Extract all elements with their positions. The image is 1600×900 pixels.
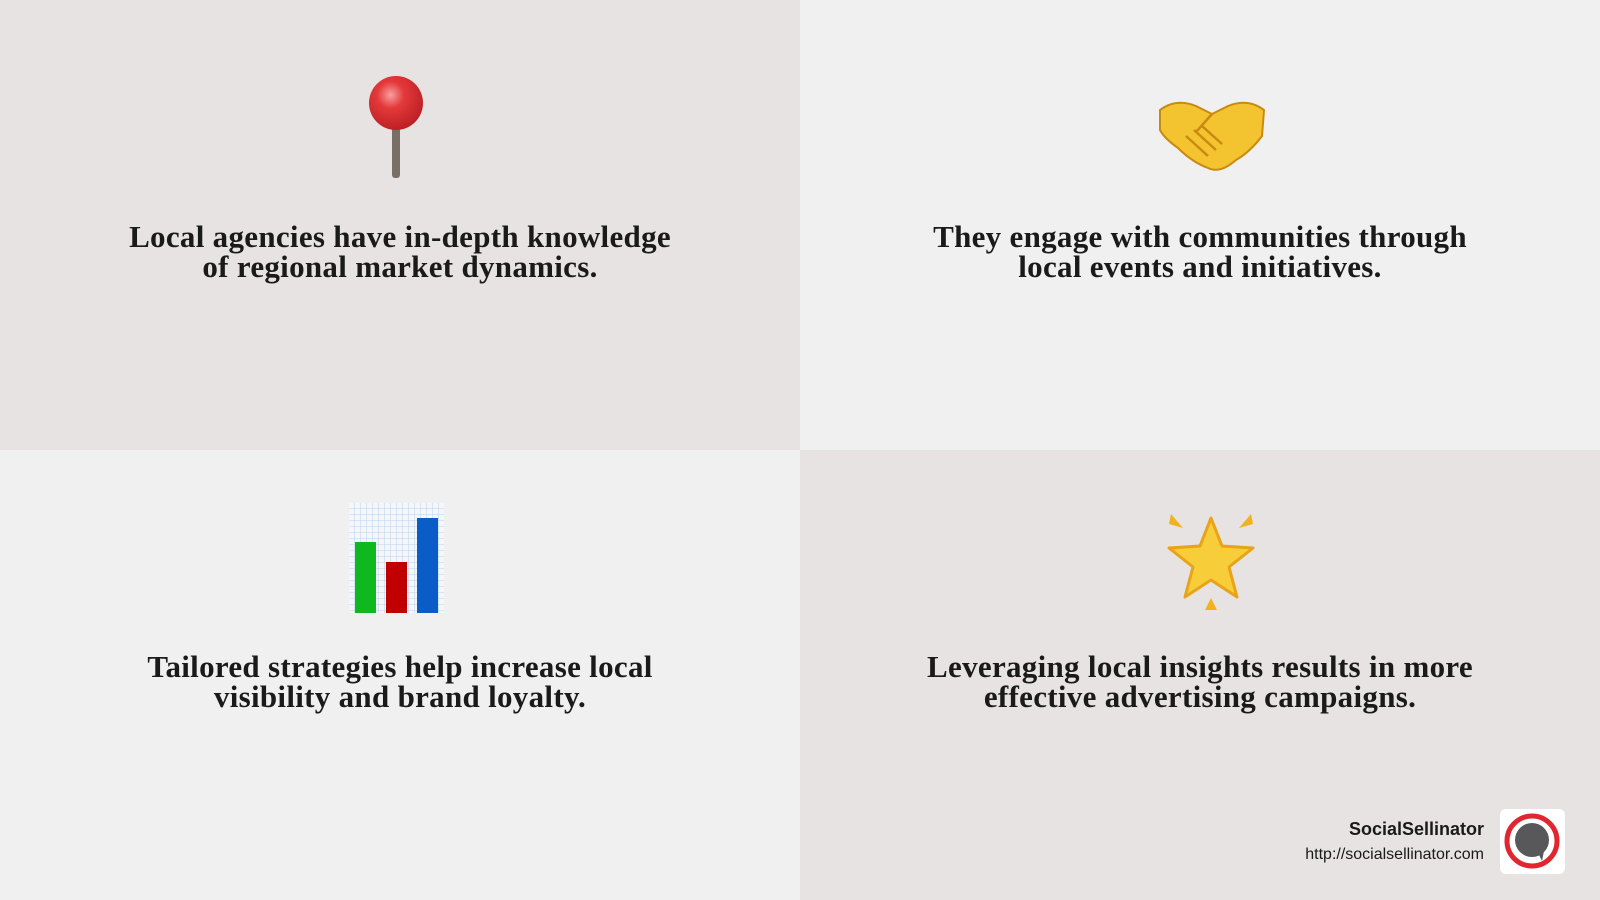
brand: SocialSellinator: http://socialsellinator.com xyxy=(1305,846,1484,863)
text: regional knowledge: Local agencies have in-depth knowledge xyxy=(129,219,671,254)
text: community: They engage with communities through xyxy=(933,219,1467,254)
text: tailored strategies: Tailored strategies help increase local xyxy=(147,649,653,684)
icon: pin xyxy=(369,76,423,178)
icon: star xyxy=(1167,514,1254,610)
brand: SocialSellinator xyxy=(1305,819,1484,863)
text: regional knowledge xyxy=(129,219,671,284)
panel: regional knowledge xyxy=(0,0,800,450)
icon: bar chart xyxy=(349,503,444,613)
panel: community xyxy=(800,0,1600,450)
panel: insights xyxy=(800,450,1600,900)
brand: SocialSellinator: SocialSellinator xyxy=(1349,819,1484,839)
text: tailored strategies xyxy=(147,649,653,714)
icon: handshake xyxy=(1159,102,1266,171)
logo xyxy=(1500,809,1565,874)
text: community: local events and initiatives. xyxy=(1018,249,1382,284)
text: insights: Leveraging local insights results in more xyxy=(927,649,1473,684)
text: regional knowledge: of regional market dynamics. xyxy=(202,249,598,284)
text: insights xyxy=(927,649,1473,714)
panel: tailored strategies xyxy=(0,450,800,900)
text: insights: effective advertising campaigns. xyxy=(984,679,1416,714)
text: community xyxy=(933,219,1467,284)
text: tailored strategies: visibility and brand loyalty. xyxy=(214,679,586,714)
